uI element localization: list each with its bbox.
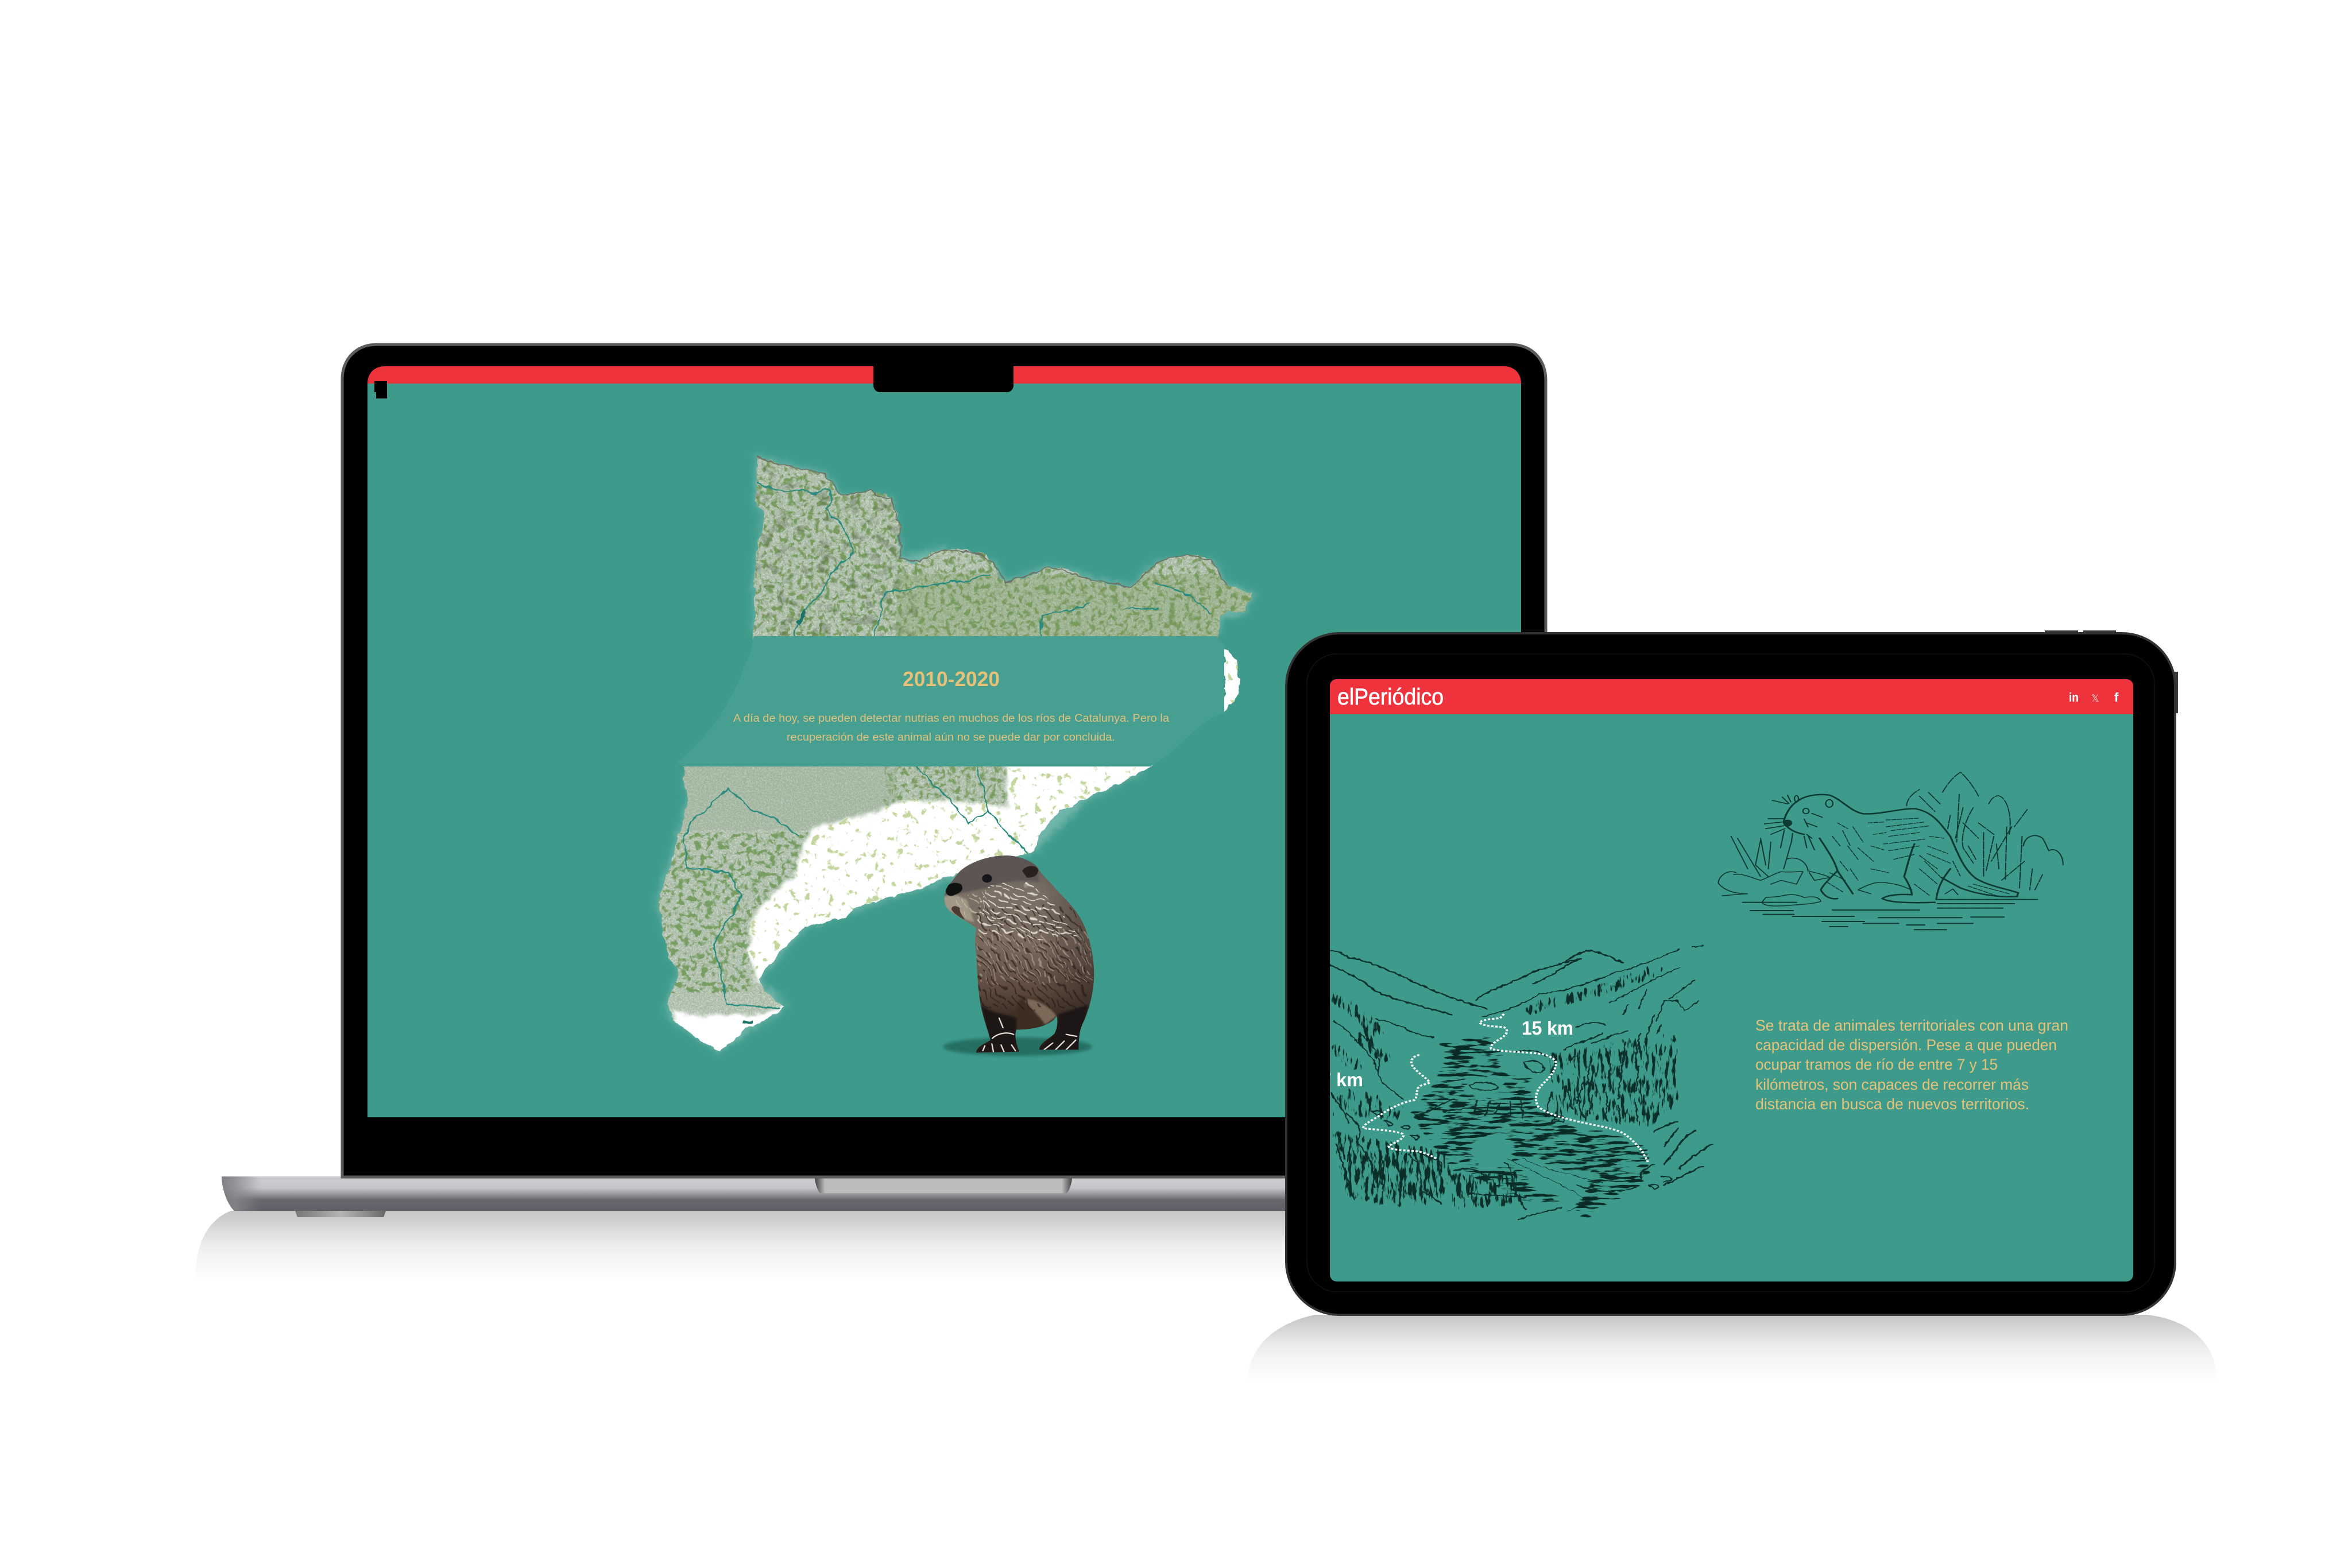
explanatory text: capacidad de dispersión. Pese a que pueden xyxy=(1755,1036,2057,1054)
valley line work xyxy=(1330,945,1713,1220)
map glow xyxy=(657,458,1254,1051)
social icons: 𝕏 xyxy=(2091,693,2099,704)
logo elPeriódico: elPeriódico xyxy=(1337,684,1444,710)
translucent caption band xyxy=(678,636,1224,766)
laptop xyxy=(222,344,1665,1217)
river bed hatching xyxy=(1405,1031,1654,1224)
reeds right xyxy=(1907,772,2042,890)
laptop base xyxy=(222,1176,1665,1217)
laptop lid bezel xyxy=(342,344,1546,1177)
header bar: laptop xyxy=(368,366,1521,384)
otter outline xyxy=(1784,795,2018,903)
otter line drawing xyxy=(1718,772,2063,930)
dotted route: 7 km xyxy=(1363,1055,1436,1159)
tablet inner outline xyxy=(1307,654,2154,1292)
otter eye xyxy=(982,874,992,882)
valley river stones xyxy=(1372,1051,1671,1189)
caption text: recuperación de este animal aún no se puede dar por concluida. xyxy=(787,731,1115,744)
explanatory text: ocupar tramos de río de entre 7 y 15 xyxy=(1755,1056,1998,1073)
reeds and rocks left xyxy=(1718,837,1830,906)
otter face details xyxy=(1765,795,1833,850)
map terrain xyxy=(649,448,1263,1056)
black logo glitch mark xyxy=(374,381,387,398)
tablet screen xyxy=(1321,679,2133,1281)
otter photo xyxy=(942,855,1094,1058)
explanatory text: kilómetros, son capaces de recorrer más xyxy=(1755,1076,2029,1093)
water lines xyxy=(1743,900,2037,930)
valley tree strokes right xyxy=(1546,1015,1662,1124)
otter body xyxy=(944,855,1094,1053)
otter head xyxy=(945,855,1039,896)
tablet bezel xyxy=(1286,633,2175,1315)
tablet xyxy=(1286,630,2178,1315)
social icons xyxy=(2069,690,2119,704)
otter ear xyxy=(1022,866,1038,878)
caption text: A día de hoy, se pueden detectar nutrias en muchos de los ríos de Catalunya. Pero la xyxy=(733,713,1169,725)
laptop ground shadow xyxy=(195,1211,1665,1280)
explanatory text: Se trata de animales territoriales con una gran xyxy=(1755,1017,2068,1034)
explanatory text: distancia en busca de nuevos territorios. xyxy=(1755,1095,2029,1113)
fur hatching xyxy=(1827,818,2009,896)
dotted route: 15 km xyxy=(1480,1014,1648,1163)
otter mouth xyxy=(951,906,965,920)
laptop screen xyxy=(368,366,1521,1117)
social icons: in xyxy=(2069,690,2079,704)
otter belly xyxy=(1016,998,1057,1029)
tablet hardware buttons xyxy=(2045,630,2178,713)
otter ground shadow xyxy=(943,1037,1092,1056)
social icons: f xyxy=(2114,690,2119,704)
map north edge line xyxy=(757,458,1227,588)
valley sketch with river routes xyxy=(1321,945,1713,1224)
tablet header bar xyxy=(1330,679,2133,714)
forest and ridge hatching xyxy=(1328,970,1680,1212)
map of Catalonia xyxy=(649,448,1263,1056)
caption year: 2010-2020 xyxy=(903,667,1000,691)
otter paws xyxy=(983,1018,1077,1052)
camera notch xyxy=(873,366,1013,392)
white coastal zone xyxy=(671,643,1263,1056)
label: 7 km: 7 km xyxy=(1321,1069,1363,1090)
otter legs xyxy=(976,1005,1088,1052)
otter fur texture xyxy=(953,883,1093,1009)
rivers xyxy=(683,482,1212,1008)
label: 15 km: 15 km xyxy=(1522,1017,1573,1039)
otter nose xyxy=(946,883,962,896)
reservoirs and delta xyxy=(744,609,806,1024)
tablet ground shadow xyxy=(1248,1315,2217,1380)
